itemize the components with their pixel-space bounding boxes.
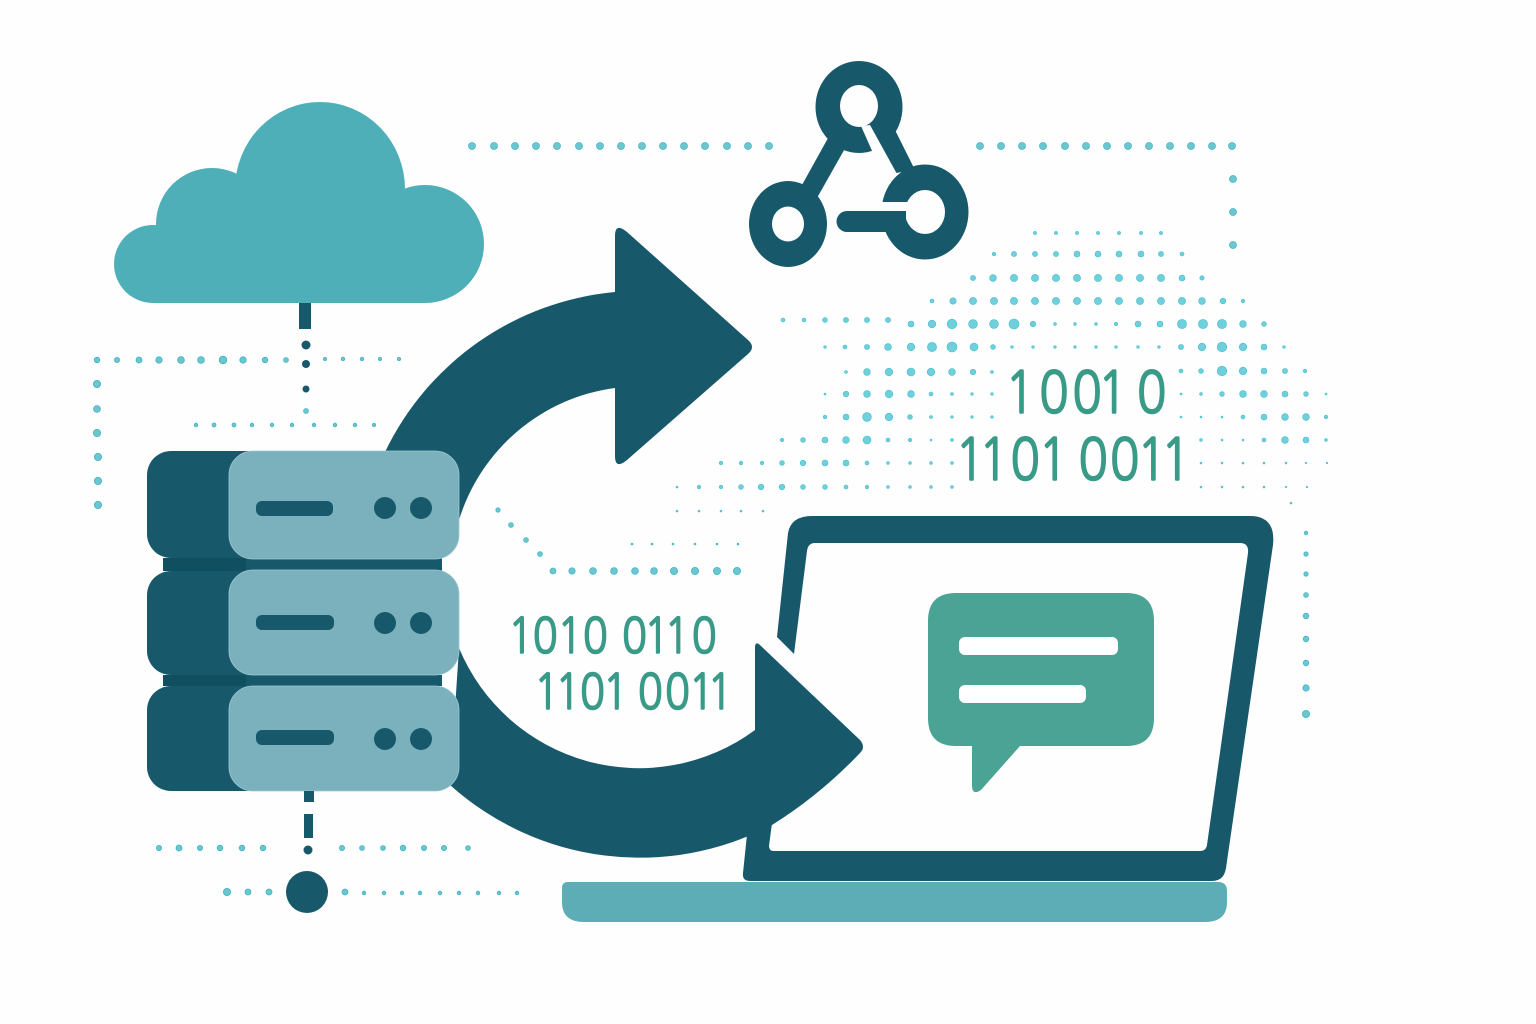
dotted connector: centre (496, 508, 741, 575)
icon: chat bubble (928, 593, 1154, 792)
server unit 3 (229, 686, 459, 791)
server back units (147, 451, 442, 791)
dotted connector: top left of network icon (468, 142, 772, 150)
icon: cloud (114, 102, 484, 303)
server connector and node (286, 791, 328, 913)
cloud connector (299, 303, 311, 414)
binary text: upper 10010: 10010 (1005, 363, 1167, 422)
binary text: lower 1101 0011: 11010011 (534, 667, 733, 717)
binary text: lower 1010 0110: 10100110 (508, 611, 717, 661)
dotted connector: below server (156, 845, 519, 896)
dotted connector: top right of network icon (976, 142, 1236, 248)
dotted connector: right column (1302, 531, 1310, 718)
circular arrow: lower (450, 643, 863, 858)
circular arrow: upper (385, 228, 752, 520)
server unit 2 (229, 570, 459, 675)
laptop base (562, 882, 1227, 922)
server stack (147, 451, 459, 791)
binary text: upper 1101 0011: 11010011 (955, 430, 1191, 489)
laptop screen frame (743, 516, 1273, 881)
server unit 1 (229, 451, 459, 559)
dotted connector: left of server (93, 356, 401, 509)
icon: network triangle (749, 61, 968, 267)
halftone dot field (676, 231, 1328, 512)
